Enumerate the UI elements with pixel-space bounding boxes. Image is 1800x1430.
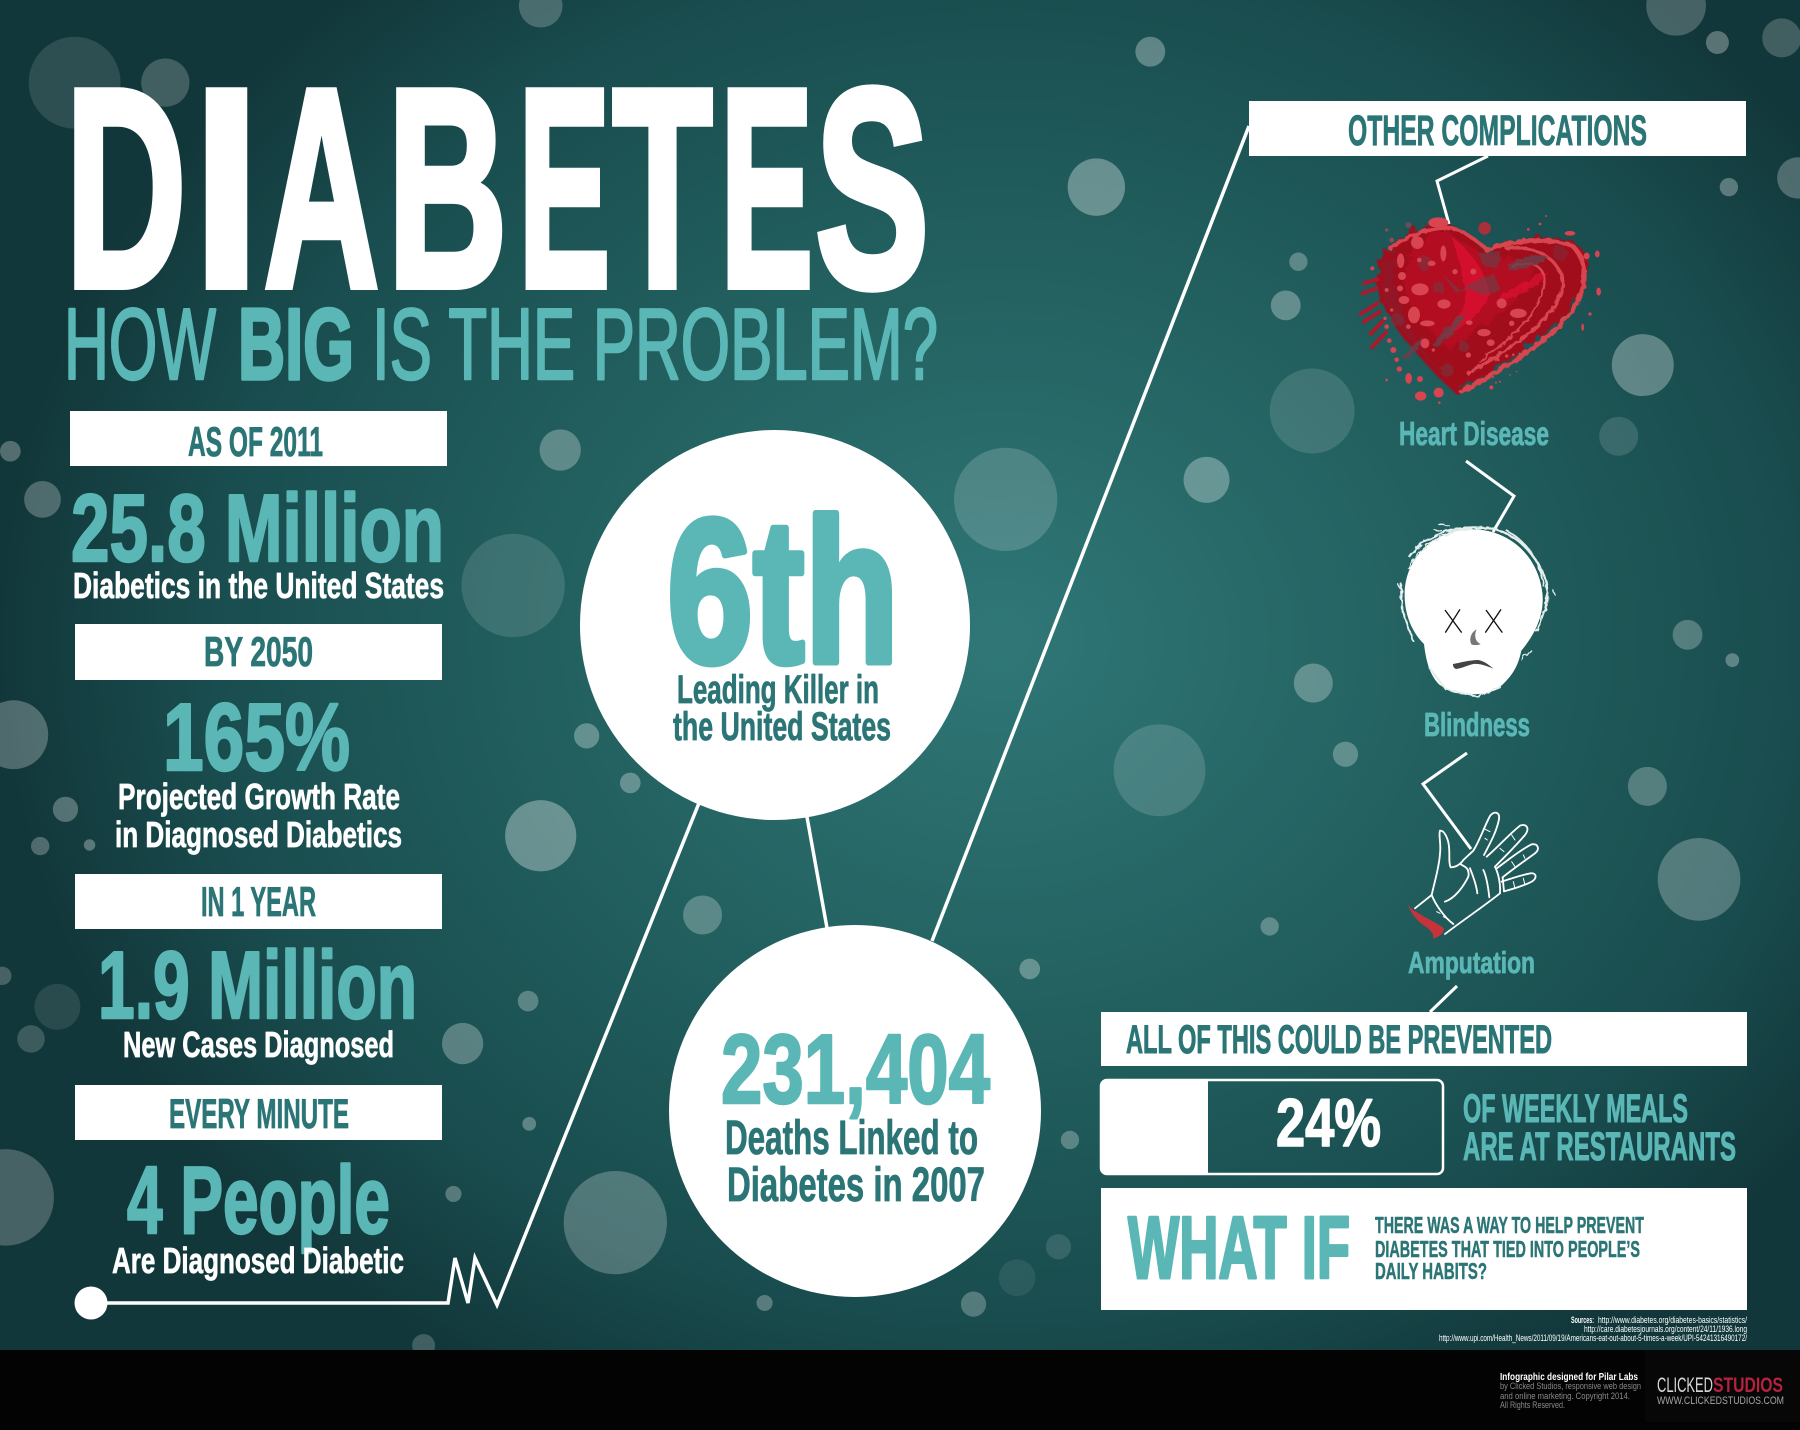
subtitle: IS THE PROBLEM?	[372, 289, 938, 401]
connector: complications to heart	[1437, 156, 1488, 224]
connector: hand to prevention	[1430, 986, 1457, 1012]
panel: as of 2011: 25.8 Million	[71, 475, 444, 582]
label: heart disease: Heart Disease	[1399, 415, 1549, 452]
progress bar: 24 percent: 24%	[1276, 1085, 1381, 1161]
circle: deaths: Deaths Linked to	[725, 1112, 978, 1165]
progress bar: 24 percent	[1101, 1080, 1443, 1174]
title: I	[193, 30, 260, 346]
panel: as of 2011: AS OF 2011	[188, 418, 323, 465]
text: weekly meals	[1463, 1087, 1736, 1169]
footer bar: All Rights Reserved.	[1500, 1400, 1565, 1410]
panel: what if	[1101, 1188, 1747, 1310]
label: amputation: Amputation	[1408, 945, 1535, 980]
panel: every minute	[75, 1085, 442, 1281]
subtitle: HOW	[64, 289, 216, 401]
connector line: stats to 6th circle	[74, 803, 699, 1320]
panel: by 2050	[75, 624, 442, 855]
footer bar	[0, 1350, 1800, 1430]
circle: 6th leading killer: 6th	[667, 477, 899, 706]
circle: 6th leading killer: the United States	[673, 705, 891, 749]
circle: deaths: 231,404	[721, 1014, 990, 1124]
heading: other complications	[1249, 101, 1746, 156]
connector: heart to skull	[1466, 461, 1514, 532]
panel: what if: WHAT IF	[1128, 1198, 1350, 1297]
sources	[1439, 1315, 1747, 1344]
panel: in 1 year: New Cases Diagnosed	[123, 1024, 394, 1065]
panel: in 1 year	[75, 874, 442, 1065]
circle: 6th leading killer: Leading Killer in	[677, 668, 879, 712]
panel: by 2050: 165%	[163, 684, 350, 791]
connector line: circles	[807, 126, 1249, 941]
label: blindness: Blindness	[1424, 706, 1530, 743]
footer bar: CLICKED	[1657, 1374, 1713, 1397]
title	[65, 30, 929, 346]
panel: in 1 year: IN 1 YEAR	[201, 878, 316, 925]
panel: in 1 year: 1.9 Million	[98, 932, 417, 1039]
connector: skull to hand	[1423, 753, 1471, 849]
title: B	[387, 30, 507, 346]
panel: every minute: 4 People	[127, 1147, 390, 1254]
title: T	[612, 30, 712, 346]
panel: what if: DAILY HABITS?	[1375, 1258, 1487, 1284]
panel: what if: THERE WAS A WAY TO HELP PREVENT	[1375, 1212, 1644, 1238]
footer bar: Infographic designed for Pilar Labs	[1500, 1372, 1638, 1383]
title: A	[264, 30, 379, 346]
title: E	[518, 30, 610, 346]
footer bar: by Clicked Studios, responsive web design	[1500, 1381, 1641, 1391]
panel: by 2050: Projected Growth Rate	[118, 776, 400, 817]
title: E	[720, 30, 813, 346]
panel: by 2050: in Diagnosed Diabetics	[115, 814, 402, 855]
icon: severed hand	[1407, 813, 1538, 939]
circle: deaths: Diabetes in 2007	[727, 1159, 985, 1212]
panel: as of 2011	[70, 411, 447, 606]
icon: painted heart	[1361, 215, 1601, 404]
panel: by 2050: BY 2050	[204, 628, 313, 675]
footer bar: and online marketing. Copyright 2014.	[1500, 1391, 1630, 1401]
title: D	[65, 30, 186, 346]
title: S	[815, 30, 929, 346]
circle: deaths	[669, 925, 1041, 1297]
circle: 6th leading killer	[580, 430, 970, 820]
subtitle: BIG	[238, 289, 354, 401]
panel: what if: DIABETES THAT TIED INTO PEOPLE’S	[1375, 1236, 1640, 1262]
panel: as of 2011: Diabetics in the United States	[73, 565, 444, 606]
icon: skull with crossed eyes	[1397, 524, 1555, 697]
sources: Sources:	[1571, 1315, 1594, 1326]
panel: every minute: Are Diagnosed Diabetic	[112, 1240, 404, 1281]
panel: every minute: EVERY MINUTE	[169, 1090, 349, 1137]
subtitle	[64, 289, 938, 401]
